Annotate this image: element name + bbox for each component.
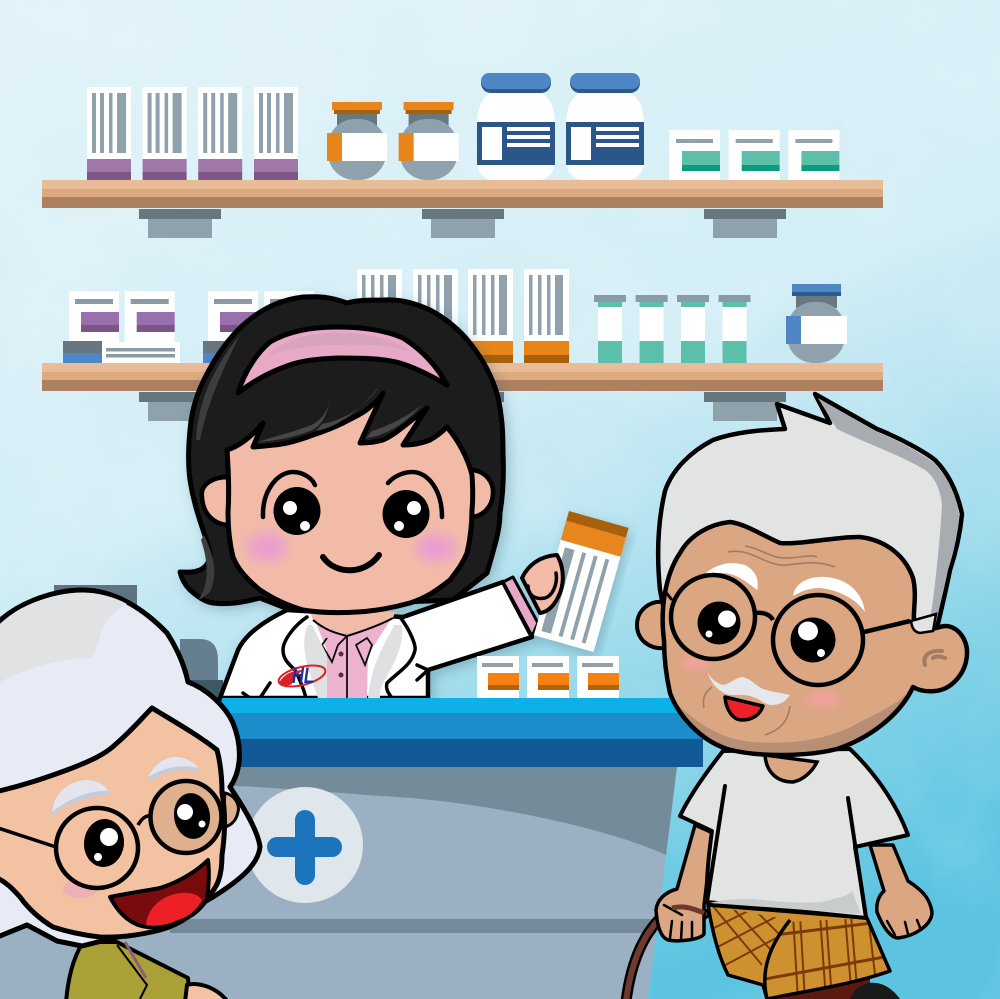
icon: plus badge <box>247 787 363 903</box>
green boxes <box>669 130 839 180</box>
pharmacist face <box>227 393 473 613</box>
purple cartons with blue blocks <box>63 291 320 363</box>
shelf plank <box>42 363 883 391</box>
shelf brackets <box>139 392 786 421</box>
woman ear <box>222 793 238 828</box>
top shelf with medicines <box>42 73 883 238</box>
cheeks <box>247 533 456 562</box>
sleeve cuff <box>503 577 538 636</box>
held medicine box <box>534 511 629 652</box>
second shelf with medicines <box>42 269 883 421</box>
man smile lines and ear detail <box>703 651 945 735</box>
man sideburn <box>911 614 936 633</box>
pharmacy counter <box>0 698 703 999</box>
woman left eye <box>82 817 126 869</box>
pharmacist right eye <box>382 472 442 538</box>
cane handle over fingers <box>672 907 704 913</box>
pharmacist left eye <box>263 472 320 535</box>
woman glasses <box>0 781 222 888</box>
man blush <box>681 657 840 708</box>
hair highlights <box>196 335 240 600</box>
counter top <box>222 698 703 767</box>
man hair shade <box>818 398 959 628</box>
counter upper dark band <box>200 767 677 855</box>
man hair <box>658 394 962 632</box>
man mouth <box>725 697 763 720</box>
man face <box>660 522 967 760</box>
man eyebrows <box>702 563 865 612</box>
woman eyebrows <box>50 757 200 818</box>
man moustache <box>707 672 790 705</box>
headband sheen <box>268 333 412 355</box>
lab coat <box>220 582 532 698</box>
counter lower strip <box>170 919 658 933</box>
purple boxes <box>87 87 298 180</box>
shelf brackets <box>139 209 786 238</box>
shelf plank <box>42 180 883 208</box>
woman hair highlight <box>0 593 127 682</box>
man left arm and hand <box>656 825 713 941</box>
blue capped jar <box>786 284 847 363</box>
man shirt <box>680 749 908 918</box>
coat lapels <box>243 617 428 698</box>
man forehead wrinkles <box>728 546 835 567</box>
pink shirt and neck <box>310 612 395 698</box>
legs and shoe <box>765 965 900 999</box>
pharmacist hair back <box>180 297 503 607</box>
pharmacist hand gripping box <box>522 555 563 613</box>
woman blush <box>63 880 97 898</box>
orange jars <box>327 102 459 180</box>
man left ear <box>637 602 666 648</box>
large white jars with blue caps <box>477 73 644 180</box>
back equipment behind grandmother <box>54 585 223 702</box>
man neck <box>765 755 817 782</box>
sarong <box>700 900 895 999</box>
coat logo <box>277 661 327 691</box>
man glasses <box>664 575 910 685</box>
orange barcode boxes <box>357 269 569 363</box>
man left eye <box>698 602 740 644</box>
elderly man <box>625 394 967 999</box>
woman face <box>0 708 225 937</box>
woman hair <box>0 590 260 946</box>
green vials <box>594 295 750 363</box>
woman mouth <box>110 860 209 927</box>
pharmacist ears <box>202 470 493 525</box>
woman right eye <box>171 791 213 841</box>
man right eye <box>790 618 836 662</box>
cane <box>625 907 704 999</box>
counter body <box>0 767 677 999</box>
coat logo: HL <box>292 663 314 688</box>
fringe highlights <box>258 385 422 442</box>
small orange boxes on counter <box>477 656 619 698</box>
smile <box>323 555 379 570</box>
pharmacist <box>180 297 538 698</box>
woman jacket <box>66 942 228 999</box>
elderly woman <box>0 590 260 999</box>
man right arm and hand <box>870 845 932 938</box>
headband <box>238 327 447 393</box>
